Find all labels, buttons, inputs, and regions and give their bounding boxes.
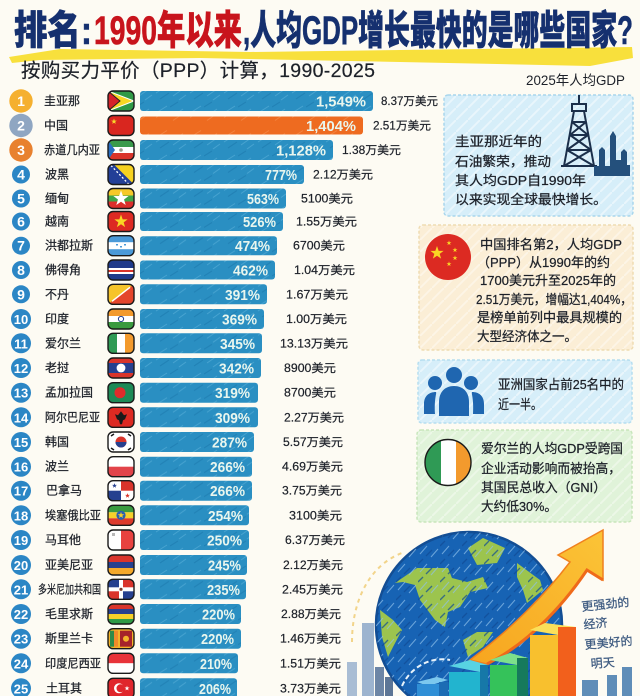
row 18: 18 (14, 508, 28, 523)
row 21: 2.45万美元 (282, 582, 343, 596)
row 22: 2.88万美元 (281, 607, 341, 621)
row 15: 287% (212, 434, 247, 452)
row 10 (11, 309, 347, 329)
row 2 (9, 114, 431, 137)
slogan: 更美好的 (584, 633, 633, 652)
row 6: 1.55万美元 (296, 214, 357, 228)
row 5: 563% (247, 191, 279, 208)
row 15: 5.57万美元 (283, 435, 343, 449)
row 4: 2.12万美元 (313, 168, 373, 182)
row 1: 圭亚那 (44, 94, 80, 108)
row 21: 235% (207, 582, 240, 599)
text: Ireland note: 其国民总收入（GNI） (481, 480, 606, 495)
row 21: 21 (14, 582, 28, 597)
icon: city skyline (594, 131, 630, 176)
row 6 (12, 212, 357, 232)
row 5 (12, 188, 353, 208)
row 19: 6.37万美元 (285, 533, 345, 547)
illustration: globe, growth arrow and bars (347, 530, 633, 696)
row 14 (11, 407, 344, 427)
row 6: 越南 (45, 214, 69, 228)
row 20: 2.12万美元 (283, 558, 343, 572)
row 2: 1,404% (306, 118, 356, 135)
row 2: 2.51万美元 (373, 118, 431, 132)
row 20: 245% (208, 558, 241, 574)
row 13: 孟加拉国 (45, 385, 93, 400)
icon: people (424, 367, 484, 416)
text: Ireland note: 企业活动影响而被抬高， (481, 460, 621, 476)
text: Ireland note: 爱尔兰的人均GDP受跨国 (481, 441, 623, 456)
panel: China note (419, 225, 633, 350)
row 22: 毛里求斯 (45, 607, 93, 621)
row 11: 爱尔兰 (45, 335, 81, 350)
row 7: 7 (17, 238, 25, 254)
text: China note: 1700美元升至2025年的 (480, 273, 616, 288)
text: Guyana note: 以来实现全球最快增长。 (455, 191, 607, 207)
row 18 (11, 505, 342, 525)
row 24: 24 (14, 656, 29, 671)
row 22: 220% (202, 606, 235, 624)
row 17: 266% (210, 483, 245, 500)
row 17: 17 (14, 484, 28, 499)
row 12: 342% (219, 360, 254, 378)
text: China note: 是榜单前列中最具规模的 (477, 309, 622, 325)
row 11: 11 (14, 336, 28, 351)
row 15: 韩国 (45, 434, 69, 449)
row 19 (11, 530, 345, 550)
row 20 (11, 555, 343, 575)
text: Asia share: 亚洲国家占前25名中的 (498, 376, 624, 392)
city skyline right (582, 667, 632, 696)
city skyline left (347, 623, 393, 696)
row 6: 526% (243, 214, 276, 231)
row 25: 25 (14, 681, 28, 696)
row 12: 8900美元 (284, 361, 336, 375)
text: Asia share: 近一半。 (498, 397, 542, 412)
row 23 (11, 629, 341, 649)
row 16: 266% (210, 459, 245, 476)
row 12: 12 (14, 361, 28, 376)
text: China note: 大型经济体之一。 (477, 329, 577, 344)
row 5: 5 (17, 190, 25, 206)
icon: Ireland flag circle (425, 439, 472, 486)
row 18: 3100美元 (289, 508, 342, 522)
row 5: 5100美元 (301, 192, 353, 206)
text: Guyana note (455, 134, 607, 207)
row 15 (11, 432, 343, 452)
row 16 (11, 457, 343, 477)
row 18: 埃塞俄比亚 (45, 507, 101, 522)
row 3: 赤道几内亚 (44, 143, 100, 157)
row 1: 1 (17, 93, 25, 109)
row 8 (12, 260, 355, 280)
row 16: 波兰 (45, 460, 69, 474)
row 12: 老挝 (45, 361, 69, 375)
row 16: 16 (14, 460, 28, 475)
row 13: 13 (14, 386, 28, 401)
text: Guyana note: 圭亚那近年的 (455, 134, 542, 149)
row 25: 土耳其 (46, 681, 82, 695)
slogan: 更强劲的 (581, 594, 630, 614)
row 8: 8 (17, 262, 25, 278)
row 6: 6 (17, 214, 25, 230)
row 1 (9, 89, 438, 113)
row 22: 22 (14, 607, 28, 622)
dashed route (402, 659, 450, 686)
row 9: 1.67万美元 (286, 287, 348, 301)
row 13: 319% (215, 385, 250, 402)
row 3: 3 (17, 142, 25, 158)
title (14, 9, 633, 53)
slogan (581, 594, 633, 671)
row 4: 波黑 (45, 168, 69, 182)
row 9: 391% (225, 287, 260, 304)
row 14: 309% (215, 410, 250, 427)
text: China note: 中国排名第2，人均GDP (480, 236, 622, 252)
row 8: 1.04万美元 (294, 263, 355, 277)
row 21: 多米尼加共和国 (38, 582, 101, 596)
row 17 (11, 481, 342, 501)
row 3 (9, 138, 401, 162)
row 13 (11, 383, 336, 403)
row 7: 6700美元 (293, 239, 345, 253)
icon: oil derrick (561, 95, 597, 166)
row 14: 2.27万美元 (284, 410, 344, 424)
row 3: 1.38万美元 (342, 143, 401, 157)
panel: Asia share (418, 360, 632, 423)
row 4 (12, 164, 373, 184)
row 4: 777% (265, 167, 297, 184)
row 11: 13.13万美元 (280, 336, 348, 350)
row 24: 印度尼西亚 (45, 655, 101, 670)
growth arrow (470, 530, 603, 664)
ranking chart (9, 89, 438, 696)
row 11 (11, 333, 348, 353)
row 21 (11, 579, 343, 599)
row 20: 20 (14, 558, 28, 573)
row 10: 369% (222, 312, 257, 328)
row 1: 1,549% (316, 94, 366, 110)
text: Guyana note: 其人均GDP自1990年 (455, 173, 586, 188)
icon: China flag circle (425, 234, 471, 280)
row 19: 19 (14, 533, 28, 548)
row 15: 15 (14, 435, 28, 450)
row 23: 1.46万美元 (280, 632, 341, 646)
row 17: 巴拿马 (46, 483, 82, 498)
slogan: 明天 (590, 655, 615, 671)
text: Guyana note: 石油繁荣，推动 (455, 154, 551, 169)
row 23: 斯里兰卡 (45, 632, 93, 646)
text: Ireland note (481, 441, 623, 514)
row 25: 3.73万美元 (280, 681, 341, 695)
row 8: 佛得角 (45, 262, 81, 277)
row 9: 9 (17, 286, 25, 302)
row 20: 亚美尼亚 (45, 558, 93, 572)
panel: Guyana oil boom (444, 95, 633, 216)
row 24 (11, 653, 341, 673)
row 10: 10 (14, 312, 28, 327)
column heading: 2025 GDP per capita: 2025年人均GDP (526, 73, 625, 88)
text: Asia share (498, 376, 624, 412)
subtitle: 按购买力平价（PPP）计算，1990-2025 (21, 60, 375, 82)
row 4: 4 (17, 166, 25, 182)
row 24: 210% (200, 656, 232, 673)
title highlight (9, 47, 633, 66)
row 11: 345% (220, 336, 255, 353)
row 23: 23 (14, 632, 28, 647)
row 1: 8.37万美元 (381, 94, 438, 108)
row 25 (11, 678, 341, 696)
row 19: 马耳他 (45, 533, 81, 547)
row 14: 14 (14, 410, 29, 425)
row 5: 缅甸 (45, 192, 69, 206)
bar chart (417, 623, 576, 696)
row 9 (12, 284, 348, 304)
row 22 (11, 604, 341, 624)
row 9: 不丹 (45, 287, 69, 301)
row 10: 1.00万美元 (286, 312, 347, 326)
title: 排名: (14, 9, 92, 53)
row 17: 3.75万美元 (282, 484, 342, 498)
text: Ireland note: 大约低30%。 (481, 499, 557, 514)
row 7: 474% (235, 238, 270, 255)
row 7 (12, 236, 345, 256)
row 14: 阿尔巴尼亚 (45, 409, 100, 424)
globe (376, 532, 562, 696)
row 2: 2 (17, 118, 25, 134)
row 2: 中国 (44, 118, 68, 132)
row 16: 4.69万美元 (282, 460, 343, 474)
panel: Ireland note (417, 430, 632, 522)
row 23: 220% (201, 631, 234, 648)
row 8: 462% (233, 262, 268, 280)
row 10: 印度 (45, 311, 69, 326)
text: China note: （PPP）从1990年的约 (477, 255, 610, 270)
row 7: 洪都拉斯 (45, 238, 93, 253)
row 18: 254% (208, 508, 243, 525)
text: China note (476, 236, 632, 344)
row 13: 8700美元 (284, 386, 336, 400)
slogan: 经济 (583, 615, 608, 632)
row 19: 250% (207, 532, 242, 550)
row 12 (11, 358, 336, 378)
row 24: 1.51万美元 (280, 656, 341, 670)
row 3: 1,128% (276, 142, 326, 160)
title: 1990年以来 (94, 9, 242, 53)
